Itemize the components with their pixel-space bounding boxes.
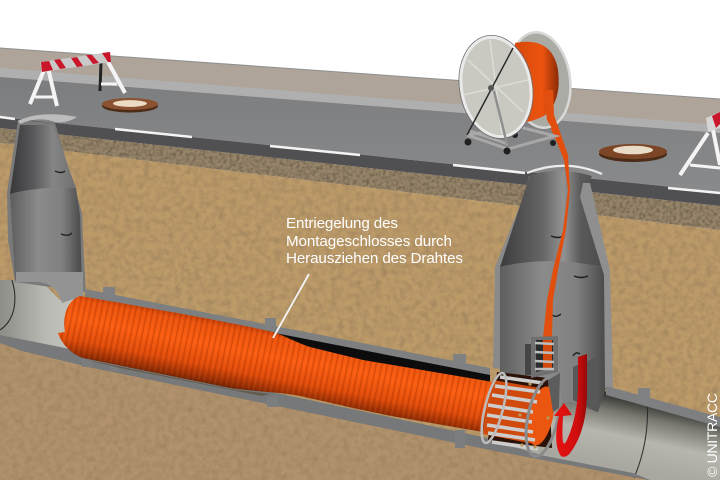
rungs (551, 236, 588, 356)
inner body (488, 372, 552, 448)
concrete lining: upper (85, 287, 720, 427)
copyright notice: © UNITRACC (704, 393, 720, 477)
shadow gap above tube (275, 333, 490, 396)
opening rim (527, 166, 602, 174)
wound orange hose (512, 42, 559, 123)
lower interior (10, 188, 82, 290)
red direction arrow (554, 354, 587, 457)
left road barrier (30, 52, 125, 106)
icon: right manhole cover (599, 144, 667, 162)
rungs (55, 171, 72, 235)
soil: gravel layer (0, 128, 720, 230)
left manhole shaft (7, 114, 86, 303)
icon: left manhole cover (102, 98, 158, 112)
mount plate (548, 373, 560, 412)
soil: sand (0, 143, 720, 480)
guide bracket (525, 336, 558, 378)
installation cage at tube front (477, 371, 566, 459)
concrete lining: lower (0, 335, 650, 480)
road markings (0, 117, 720, 193)
opening rim (18, 114, 77, 124)
curb (0, 68, 720, 134)
orange inliner tube (58, 296, 492, 432)
right manhole shaft (493, 166, 613, 412)
front flange (453, 32, 539, 142)
street surface (0, 48, 720, 206)
road (0, 77, 720, 192)
wheels (464, 132, 556, 154)
sidewalk (0, 48, 720, 127)
joint collars (103, 287, 650, 402)
shaft interior neck (500, 171, 606, 268)
shadow panel behind arrow (573, 357, 597, 412)
bars (487, 377, 543, 449)
dark strut (467, 48, 513, 144)
right road barrier (680, 112, 720, 175)
orange strip running down the shaft (543, 92, 570, 338)
outer wall right (580, 183, 613, 388)
frame base (467, 127, 555, 149)
hose strip over flange (543, 90, 560, 132)
neck interior (10, 125, 76, 194)
cable drum (451, 28, 576, 154)
joint collars (82, 358, 465, 448)
callout text: Montageschlosses durch (286, 233, 452, 250)
left sewer pipe section (0, 280, 90, 355)
left ring (477, 371, 511, 445)
callout text: Herausziehen des Drahtes (286, 250, 463, 267)
spokes (463, 40, 528, 134)
tube opening (523, 384, 559, 448)
right sewer pipe section (490, 385, 720, 480)
road cut face (0, 117, 720, 206)
concrete above arch (16, 272, 83, 303)
right ring (520, 375, 566, 459)
callout text (286, 215, 463, 267)
shaft interior lower (500, 261, 606, 412)
shadow under tube (83, 359, 270, 396)
outer wall (7, 120, 86, 292)
outer wall left (493, 176, 534, 369)
callout text: Entriegelung des (286, 215, 398, 232)
callout leader line (273, 274, 309, 338)
bolts (518, 382, 550, 449)
back flange (504, 28, 576, 132)
